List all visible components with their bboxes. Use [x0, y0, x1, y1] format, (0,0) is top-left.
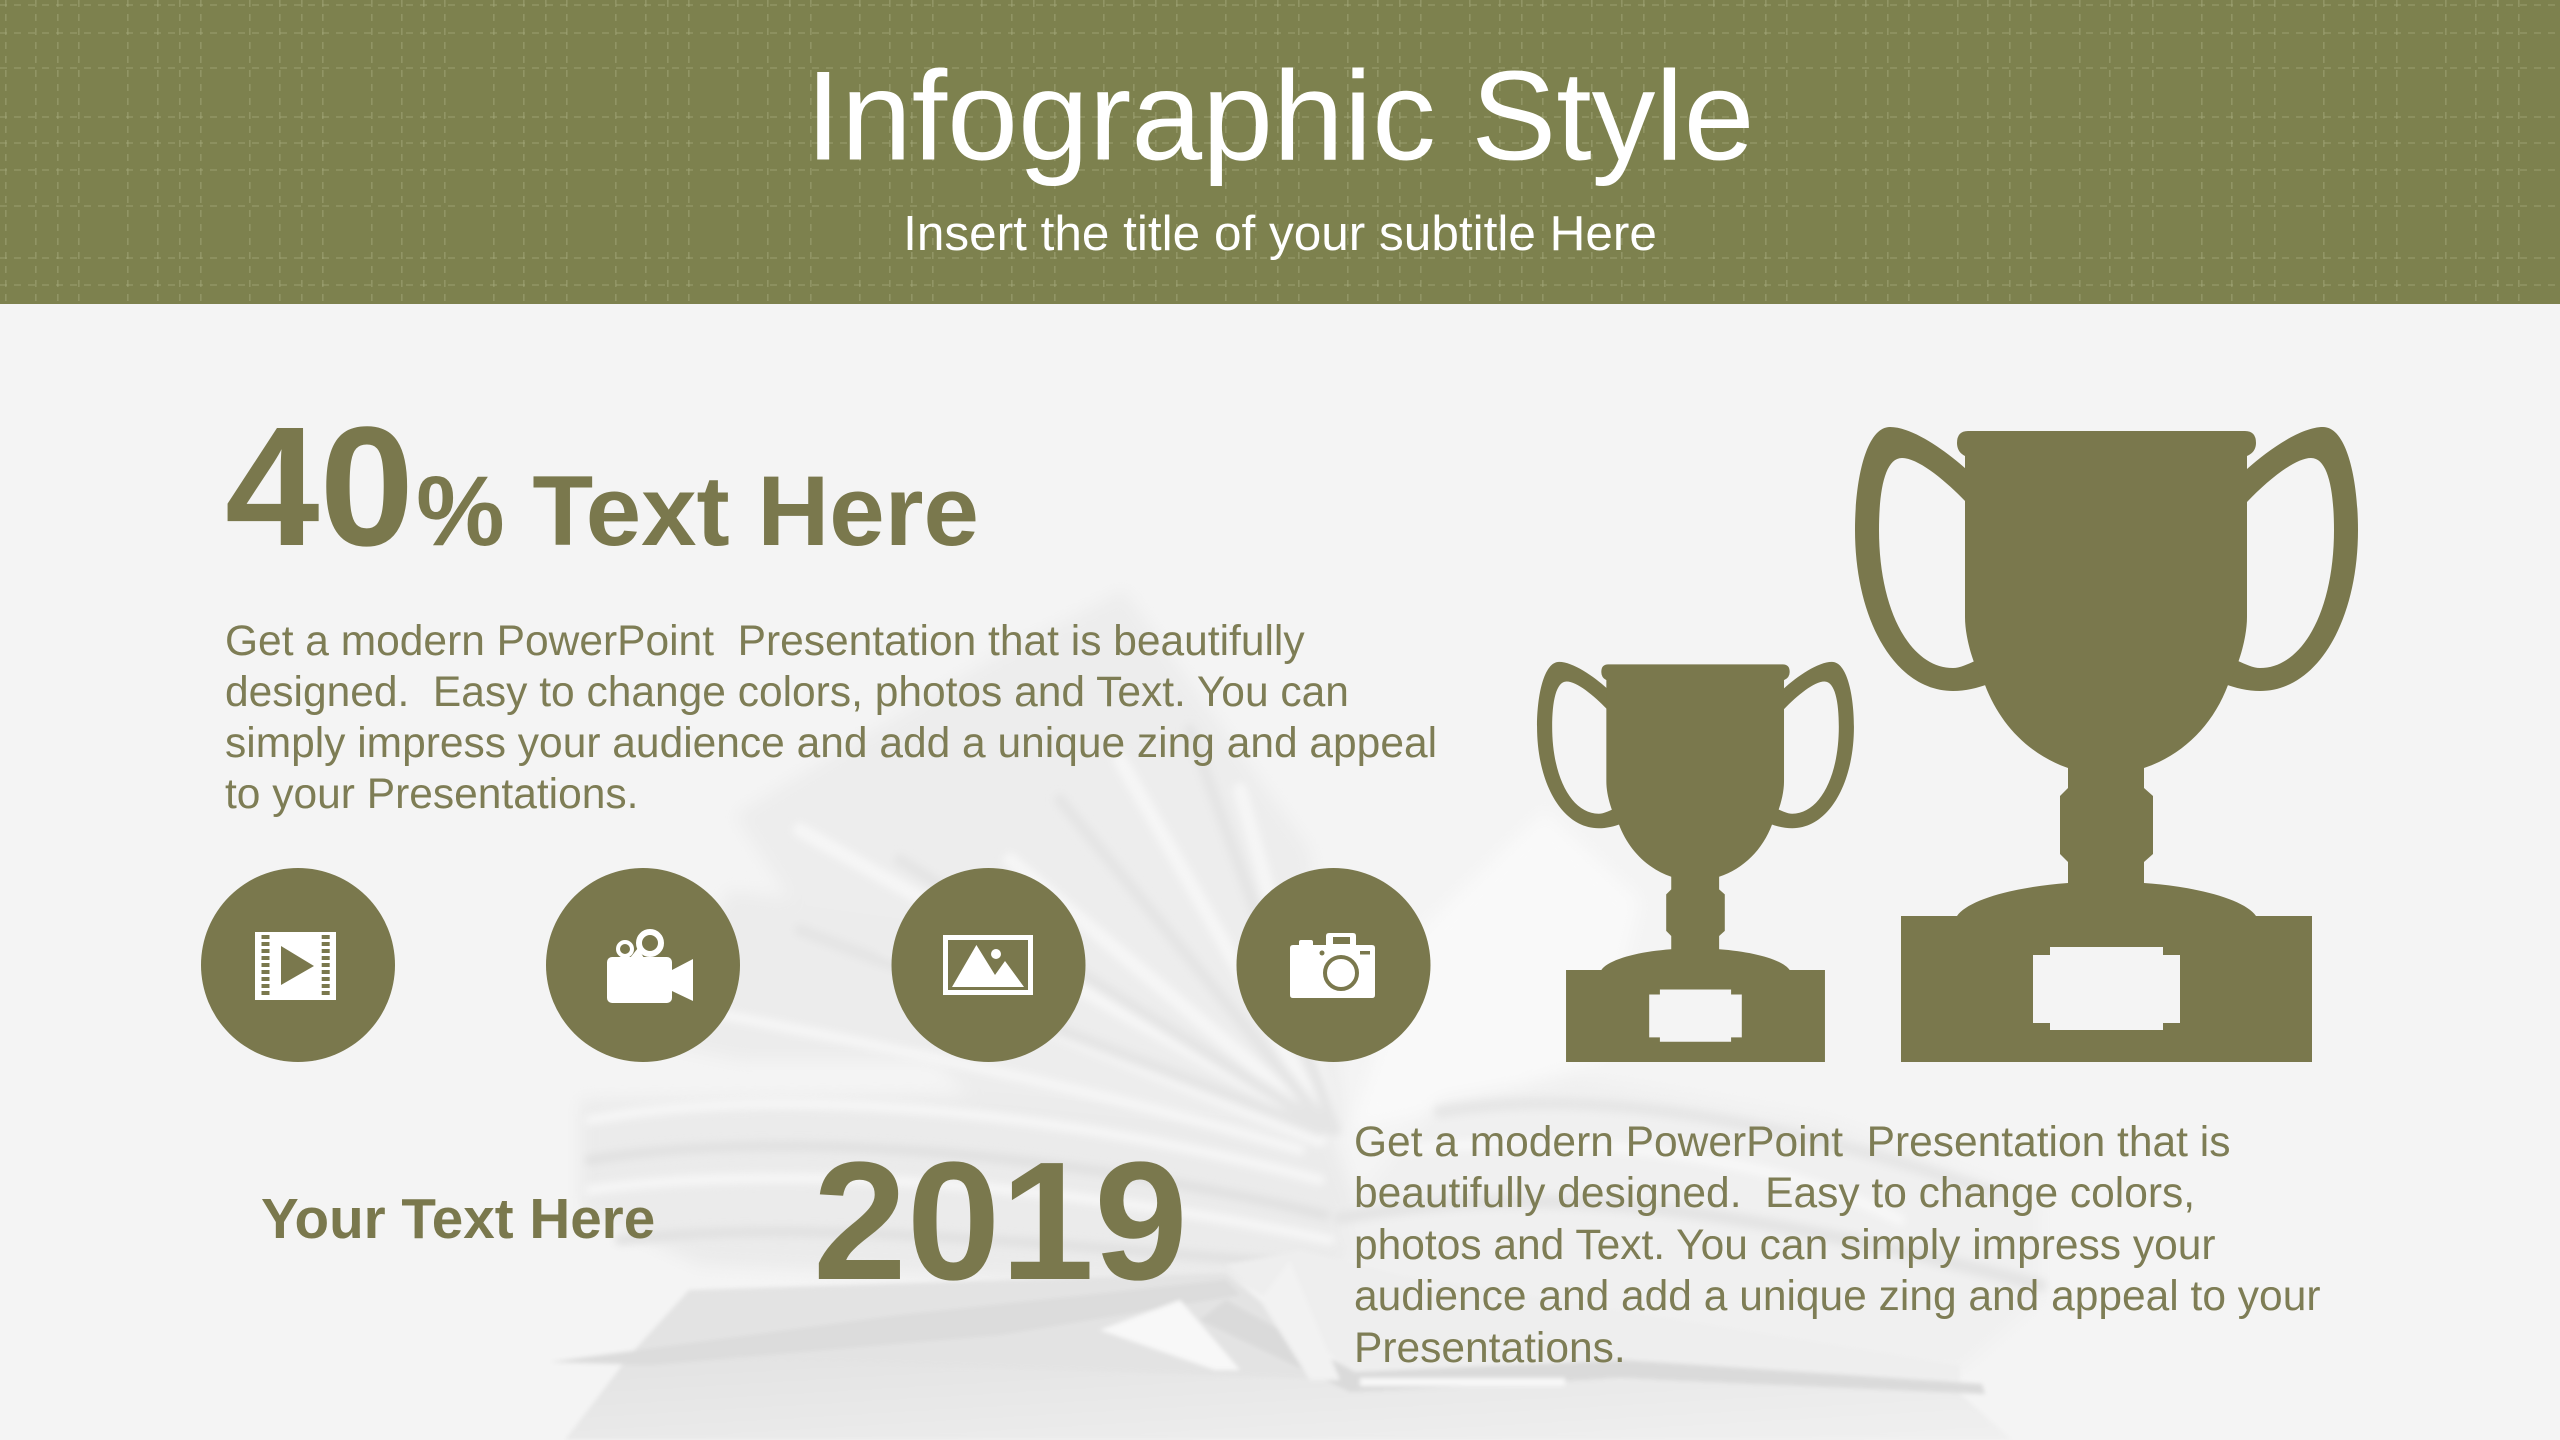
text block: top left paragraph: to your Presentations.: [225, 771, 638, 818]
text block: top left paragraph: simply impress your audience and add a unique zing and appeal: [225, 720, 1437, 767]
subtitle: Insert the title of your subtitle Here: [903, 206, 1657, 261]
text block: top left paragraph: [225, 618, 1437, 818]
title: Infographic Style: [806, 44, 1754, 186]
background: faded open book photo: [0, 304, 2560, 1440]
text block: bottom right paragraph: beautifully designed. Easy to change colors,: [1354, 1170, 2195, 1217]
text block: bottom right paragraph: [1354, 1119, 2320, 1372]
icon: video camera: [546, 868, 740, 1062]
text block: bottom right paragraph: audience and add a unique zing and appeal to your: [1354, 1273, 2320, 1320]
text block: bottom right paragraph: photos and Text. You can simply impress your: [1354, 1222, 2216, 1269]
heading: 40% text here: 40% Text Here: [225, 392, 979, 582]
header banner: [0, 0, 2560, 304]
icon: small trophy: [1537, 662, 1854, 1062]
text block: top left paragraph: Get a modern PowerPoint Presentation that is beautifully: [225, 618, 1305, 665]
label: your text here: Your Text Here: [261, 1187, 655, 1250]
icon: photo camera: [1236, 868, 1430, 1062]
text block: top left paragraph: designed. Easy to change colors, photos and Text. You can: [225, 669, 1349, 716]
year: 2019: 2019: [813, 1126, 1188, 1315]
icon: large trophy: [1855, 427, 2358, 1062]
icon: film play: [201, 868, 395, 1062]
text block: bottom right paragraph: Presentations.: [1354, 1325, 1626, 1372]
text block: bottom right paragraph: Get a modern PowerPoint Presentation that is: [1354, 1119, 2230, 1166]
icon: picture: [892, 868, 1086, 1062]
